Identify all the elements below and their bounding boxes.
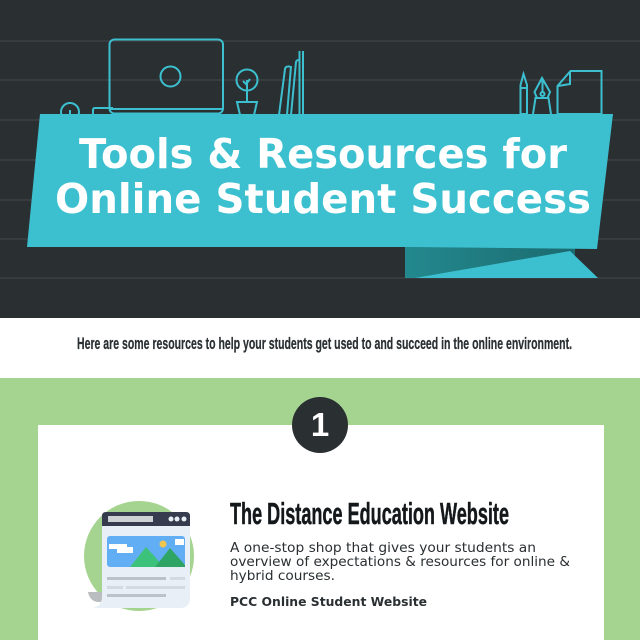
card link: PCC Online Student Website <box>230 594 427 609</box>
icon: document <box>558 71 602 114</box>
icon: books <box>279 51 303 115</box>
icon: potted plant <box>236 70 258 115</box>
icon: web page <box>84 501 194 611</box>
card description: overview of expectations & resources for online & <box>230 555 570 570</box>
icon: phone <box>93 108 113 115</box>
number badge <box>292 397 348 453</box>
banner fold <box>405 245 598 278</box>
icon: laptop <box>110 40 223 114</box>
banner <box>27 114 613 249</box>
icon: fountain pen <box>533 78 551 114</box>
title <box>55 130 591 223</box>
number badge: 1 <box>311 406 329 443</box>
panel: resource card <box>38 397 604 640</box>
title: Online Student Success <box>55 175 591 223</box>
card description: A one-stop shop that gives your students an <box>230 541 536 556</box>
card description <box>230 541 570 584</box>
title: Tools & Resources for <box>79 130 568 178</box>
icon: mouse <box>61 103 79 121</box>
card description: hybrid courses. <box>230 569 335 584</box>
icon: pencil <box>520 74 527 114</box>
icon: desk tools line art <box>61 40 602 121</box>
panel: green section <box>0 378 640 640</box>
header background <box>0 0 640 318</box>
